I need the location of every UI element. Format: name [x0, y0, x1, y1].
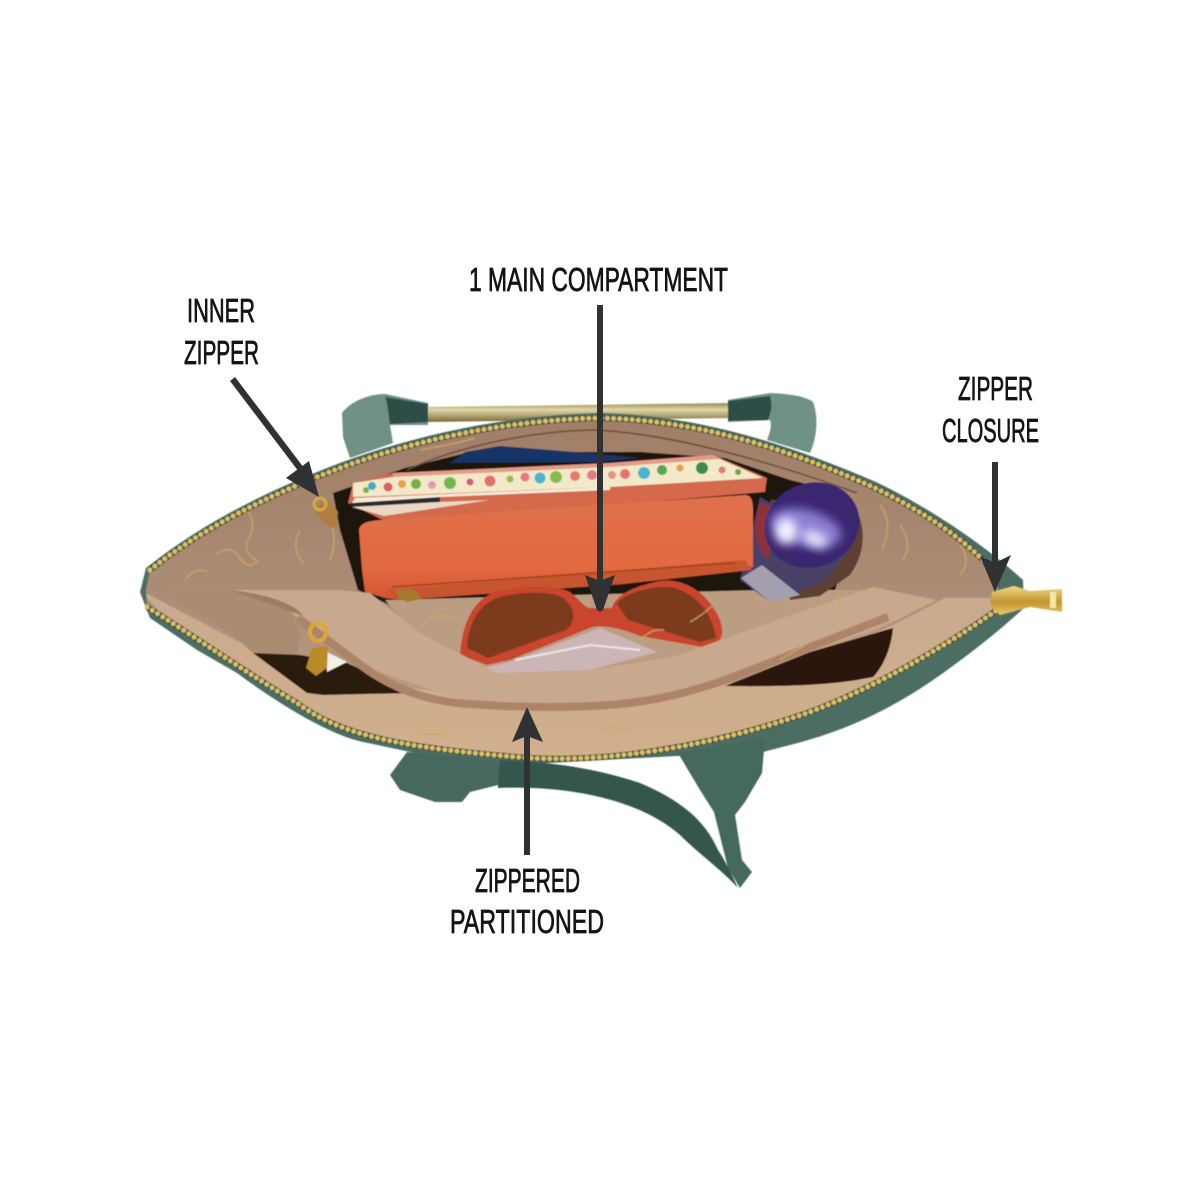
partition flap — [234, 586, 936, 694]
blue item — [450, 446, 640, 463]
photo: open handbag from above — [140, 393, 1062, 888]
inner zipper pull — [314, 498, 338, 529]
floral dots — [363, 462, 741, 493]
front lining — [146, 593, 994, 756]
flask — [739, 482, 860, 602]
back lining fold — [407, 430, 857, 493]
arrow: zippered partition — [512, 707, 543, 855]
label: zippered partitioned: ZIPPERED — [475, 862, 580, 899]
floral notebook — [348, 455, 767, 520]
label: zippered partitioned — [450, 862, 604, 940]
sunglasses — [460, 581, 722, 673]
label: inner zipper: ZIPPER — [184, 334, 259, 371]
arrow: main compartment — [585, 305, 615, 612]
label: 1 main compartment: 1 MAIN COMPARTMENT — [469, 261, 728, 298]
label: zippered partitioned: PARTITIONED — [450, 903, 604, 940]
flask shadow — [770, 500, 863, 600]
arrow: zipper closure — [980, 462, 1011, 592]
front handle strap — [498, 760, 738, 888]
white tag in pocket — [327, 652, 347, 672]
back lining — [145, 420, 999, 692]
back handles and gold bar — [342, 393, 816, 458]
dark pocket right — [725, 628, 893, 686]
orange pouch — [359, 495, 753, 602]
partition zipper — [298, 617, 888, 707]
green leather body — [140, 413, 1024, 764]
dark interior — [333, 452, 855, 610]
label: zipper closure: ZIPPER — [958, 370, 1033, 407]
front handle right — [678, 738, 765, 888]
label: inner zipper — [184, 292, 259, 371]
main zipper teeth — [147, 418, 997, 759]
label: zipper closure — [942, 370, 1039, 449]
lining patterns — [185, 438, 966, 739]
label: inner zipper: INNER — [187, 292, 255, 329]
dark pocket left — [253, 653, 413, 695]
interior clipped to the zipper opening — [140, 410, 1010, 770]
front handle left — [390, 752, 500, 802]
partition zipper pull — [306, 623, 328, 676]
lining behind items — [384, 589, 883, 657]
arrow: inner zipper — [230, 377, 319, 497]
main zipper pull — [990, 586, 1062, 615]
label: zipper closure: CLOSURE — [942, 412, 1039, 449]
